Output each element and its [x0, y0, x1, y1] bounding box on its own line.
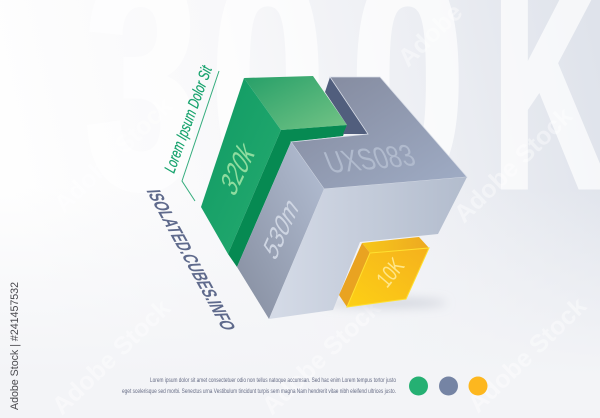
body text: eget scelerisque sed morbi. Senectus urna Vestibulum tincidunt turpis sem magna Nam hendrerit vitae nibh eleifend ultrices justo.: [122, 389, 396, 395]
green cube dark side: [228, 125, 347, 267]
yellow cube: [339, 237, 429, 307]
floor shadow: [323, 298, 447, 308]
grey main cube: [237, 77, 467, 319]
legend dot yellow: [468, 376, 488, 396]
notch inner face: [325, 77, 368, 134]
watermarks: Adobe Stock: [47, 294, 176, 418]
yellow front face: [347, 248, 429, 307]
watermarks: Adobe Stock: [463, 292, 592, 418]
watermarks: Adobe: [393, 0, 468, 72]
watermarks: Adobe Stock: [449, 102, 578, 228]
grey top face: [291, 77, 467, 189]
grey label UXS083: UXS083: [319, 138, 420, 180]
yellow label 10K: 10K: [371, 252, 409, 292]
grey front face: [269, 177, 467, 319]
yellow top face: [362, 237, 429, 253]
watermarks: Adobe Stock: [257, 294, 386, 418]
green cube top face: [244, 76, 347, 130]
legend dot green: [409, 376, 428, 396]
green cube left face: [201, 78, 281, 254]
green callout line: [182, 71, 219, 201]
site name ISOLATED.CUBES.INFO: ISOLATED.CUBES.INFO: [141, 189, 240, 331]
legend dot grey: [439, 376, 458, 396]
body text: Lorem ipsum dolor sit amet consectetuer odio non tellus natoque accumsan. Sed hac enim Lorem tempus tortor justo: [150, 378, 397, 384]
legend dots: [409, 376, 488, 396]
grey label 530m: 530m: [259, 190, 303, 267]
green value 320k: 320k: [216, 133, 259, 203]
watermarks: Adobe Stock: [49, 92, 178, 218]
green cube: [201, 76, 347, 267]
large background title 300K: [85, 0, 600, 252]
stock id vertical text: Adobe Stock | #241457532: [9, 282, 21, 410]
green heading Lorem Ipsum Dolor Sit: Lorem Ipsum Dolor Sit: [162, 63, 216, 176]
grey left face: [237, 142, 324, 319]
body text: [122, 378, 397, 395]
yellow left face: [339, 243, 370, 307]
